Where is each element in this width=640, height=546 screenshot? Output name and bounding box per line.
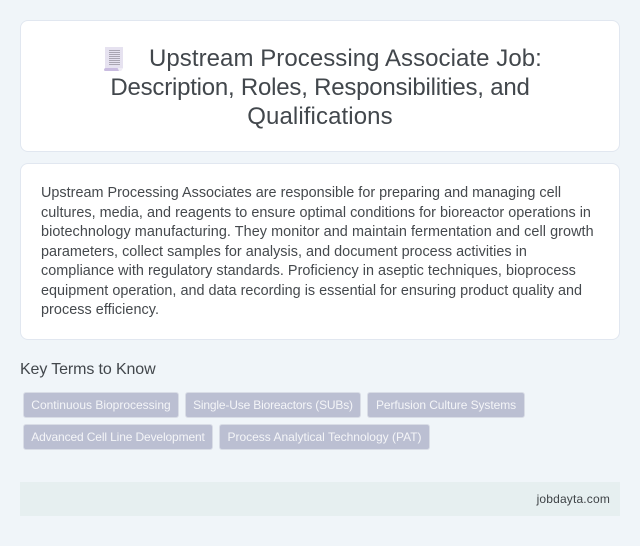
title: Qualifications <box>247 103 393 130</box>
text block: description <box>41 185 594 318</box>
panel: title card <box>20 20 620 152</box>
icon: document scroll <box>104 47 123 71</box>
panel: description card <box>20 163 620 340</box>
heading: key terms: Key Terms to Know <box>20 361 156 378</box>
tag: advanced cell line development: Advanced Cell Line Development <box>31 430 205 444</box>
text block: description: parameters, collect samples for analysis, and document process activities in <box>41 244 527 260</box>
text block: description: cultures, media, and reagents to ensure optimal conditions for bioreactor operations in <box>41 204 591 220</box>
tag: single-use bioreactors: Single-Use Bioreactors (SUBs) <box>193 398 353 412</box>
title: Description, Roles, Responsibilities, and <box>110 74 530 101</box>
title: Upstream Processing Associate Job: <box>149 45 542 72</box>
footer text: source: jobdayta.com <box>537 492 610 506</box>
footer bar <box>20 482 620 516</box>
title <box>110 45 542 130</box>
text block: description: compliance with regulatory standards. Proficiency in aseptic techniques, bioprocess <box>41 263 576 279</box>
tag: continuous bioprocessing <box>23 392 179 418</box>
text block: description: biotechnology manufacturing. They monitor and maintain fermentation and cell growth <box>41 224 594 240</box>
tag: process analytical technology <box>219 424 430 450</box>
text block: description: equipment operation, and data recording is essential for ensuring product quality and <box>41 282 582 298</box>
tag group: key terms <box>23 392 525 450</box>
tag: process analytical technology: Process Analytical Technology (PAT) <box>227 430 422 444</box>
tag: advanced cell line development <box>23 424 213 450</box>
text block: description: process efficiency. <box>41 302 159 318</box>
tag: single-use bioreactors <box>185 392 361 418</box>
tag: continuous bioprocessing: Continuous Bioprocessing <box>31 398 171 412</box>
tag: perfusion culture systems: Perfusion Culture Systems <box>376 398 516 412</box>
tag: perfusion culture systems <box>367 392 525 418</box>
text block: description: Upstream Processing Associates are responsible for preparing and managing cell <box>41 185 561 201</box>
